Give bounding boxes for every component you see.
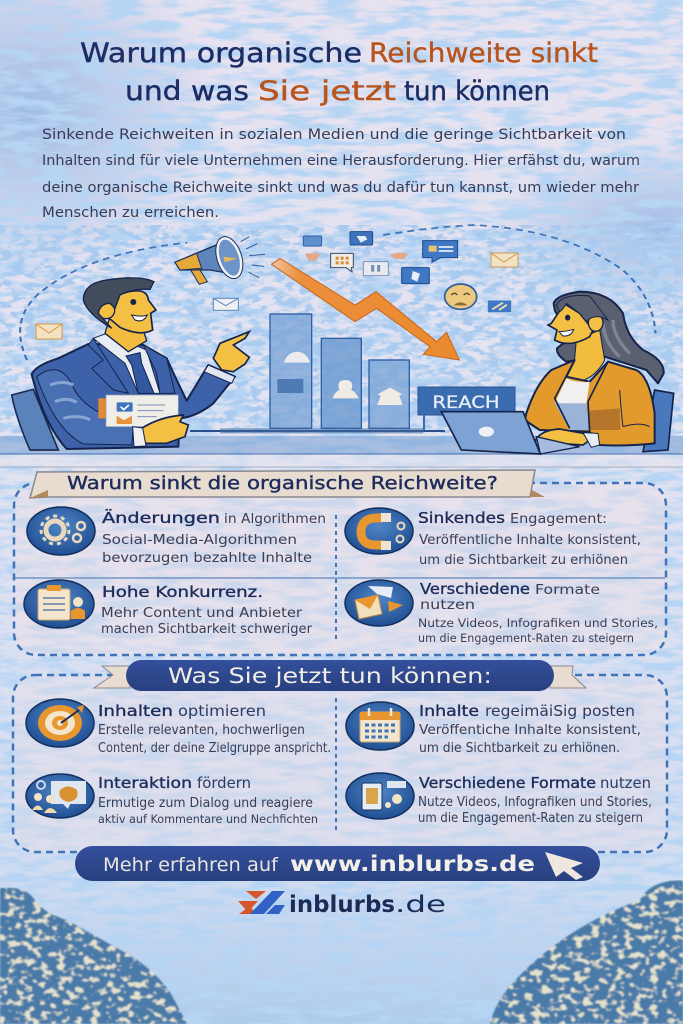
arrow: decline bbox=[272, 258, 459, 360]
text: Änderungen: Social-Media-Algorithmen bbox=[102, 533, 297, 548]
title: Reichweite sinkt bbox=[369, 38, 598, 69]
illustration bbox=[0, 225, 683, 467]
text: Interaktion fördern: aktiv auf Kommentare und Nechfichten bbox=[98, 812, 318, 826]
banner: heading: Warum sinkt die organische Reichweite? bbox=[67, 473, 498, 494]
text: Inhalten optimieren: Content, der deine Zielgruppe anspricht. bbox=[98, 741, 331, 756]
text: Sinkendes Engagement: um die Sichtbarkeit zu erhiönen bbox=[419, 553, 628, 568]
text: Verschiedene Formate: Nutze Videos, Infografiken und Stories, bbox=[418, 616, 658, 630]
banner: heading: Was Sie jetzt tun können: bbox=[168, 664, 492, 688]
text: Interaktion fördern bbox=[98, 774, 318, 826]
text: Verschiedene Formate: um die Engagement-Raten zu steigern bbox=[418, 631, 634, 645]
text: Interaktion fördern: fördern bbox=[197, 774, 251, 792]
text: Sinkendes Engagement: Sinkendes bbox=[418, 509, 505, 527]
text: Verschiedene Formate bbox=[418, 580, 658, 645]
title bbox=[80, 38, 598, 107]
icon: calendar bbox=[346, 702, 414, 750]
text: Inhalte regelmäßig posten: regeimäiSig posten bbox=[485, 702, 635, 720]
icon: envelope formats bbox=[345, 580, 413, 626]
text: Hohe Konkurrenz bbox=[101, 583, 313, 637]
reach sign bbox=[418, 387, 515, 431]
text: Inhalte regelmäßig posten: Inhalte bbox=[419, 702, 479, 720]
text: Verschiedene Formate nutzen bbox=[418, 774, 652, 826]
intro text: Menschen zu erreichen. bbox=[42, 205, 219, 221]
icon: magnet bbox=[345, 508, 413, 554]
call to action bbox=[75, 846, 600, 881]
panel: Was Sie jetzt tun können bbox=[13, 660, 667, 852]
text: Inhalte regelmäßig posten: um die Sichtbarkeit zu erhiönen. bbox=[419, 741, 620, 756]
text: Inhalte regelmäßig posten: Veröffentiche Inhalte konsistent, bbox=[419, 723, 641, 738]
reach sign: REACH bbox=[432, 393, 500, 413]
call to action: www.inblurbs.de bbox=[290, 852, 535, 876]
text: Verschiedene Formate nutzen: Verschiedene Formate bbox=[419, 774, 596, 792]
text: Interaktion fördern: Ermutige zum Dialog und reagiere bbox=[98, 796, 313, 811]
intro text: Sinkende Reichweiten in sozialen Medien und die geringe Sichtbarkeit von bbox=[42, 127, 626, 143]
text: Verschiedene Formate nutzen: Nutze Videos, Infografiken und Stories, bbox=[418, 795, 652, 810]
text: Änderungen bbox=[102, 508, 326, 566]
text: Hohe Konkurrenz: machen Sichtbarkeit schweriger bbox=[101, 622, 313, 637]
envelope bbox=[213, 298, 238, 310]
text: Verschiedene Formate: Formate bbox=[535, 583, 600, 598]
icon: cursor bbox=[545, 852, 583, 880]
banner: heading bbox=[94, 660, 586, 691]
panel: Warum sinkt bbox=[14, 470, 666, 655]
envelopes bbox=[36, 253, 518, 339]
banner: heading bbox=[30, 470, 545, 498]
intro text: Inhalten sind für viele Unternehmen eine Herausforderung. Hier erfähst du, warum bbox=[42, 153, 640, 169]
text: Sinkendes Engagement: Engagement: bbox=[510, 512, 607, 527]
text: Inhalte regelmäßig posten bbox=[419, 702, 641, 756]
logo bbox=[238, 891, 446, 918]
intro text: deine organische Reichweite sinkt und was du dafür tun kannst, um wieder mehr bbox=[42, 180, 639, 196]
table bbox=[0, 431, 683, 467]
megaphone bbox=[175, 233, 265, 284]
title: Sie jetzt bbox=[258, 76, 396, 107]
title: tun können bbox=[404, 76, 550, 107]
title: und was bbox=[125, 76, 249, 107]
emoji and flag bbox=[445, 284, 512, 313]
icon: formats bbox=[346, 773, 414, 819]
text: Verschiedene Formate: Verschiedene bbox=[420, 580, 530, 598]
text: Hohe Konkurrenz: Mehr Content und Anbieter bbox=[101, 606, 303, 621]
text: Verschiedene Formate: nutzen bbox=[420, 598, 475, 613]
man bbox=[12, 278, 249, 450]
text: Interaktion fördern: Interaktion bbox=[98, 774, 192, 792]
text: Änderungen: bevorzugen bezahlte Inhalte bbox=[102, 551, 312, 566]
text: Verschiedene Formate nutzen: nutzen bbox=[600, 774, 651, 792]
woman bbox=[525, 292, 674, 452]
title: Warum organische bbox=[80, 38, 362, 69]
text: Inhalten optimieren: Inhalten bbox=[98, 702, 173, 720]
text: Änderungen: in Algorithmen bbox=[224, 512, 326, 527]
icon: interaction bbox=[26, 774, 94, 818]
text: Inhalten optimieren bbox=[98, 702, 331, 756]
social icons bbox=[303, 232, 458, 284]
text: Änderungen: Änderungen bbox=[102, 508, 220, 527]
intro text bbox=[42, 127, 640, 221]
icon: clipboard bbox=[24, 580, 94, 628]
logo: .de bbox=[395, 892, 446, 918]
text: Inhalten optimieren: optimieren bbox=[178, 702, 266, 720]
laptop bbox=[441, 412, 580, 454]
text: Inhalten optimieren: Erstelle relevanten, hochwerligen bbox=[98, 723, 305, 738]
dashed arcs bbox=[20, 225, 655, 360]
text: Verschiedene Formate nutzen: um die Engagement-Raten zu steigern bbox=[418, 811, 643, 826]
logo: inblurbs bbox=[289, 892, 395, 918]
icon: gears bbox=[27, 507, 95, 555]
icon: target bbox=[26, 699, 94, 747]
text: Sinkendes Engagement: Veröffentliche Inhalte konsistent, bbox=[419, 533, 641, 548]
bar chart bbox=[220, 314, 423, 433]
call to action: Mehr erfahren auf bbox=[103, 854, 279, 876]
text: Sinkendes Engagement bbox=[418, 509, 641, 568]
text: Hohe Konkurrenz: Hohe Konkurrenz. bbox=[102, 583, 263, 601]
